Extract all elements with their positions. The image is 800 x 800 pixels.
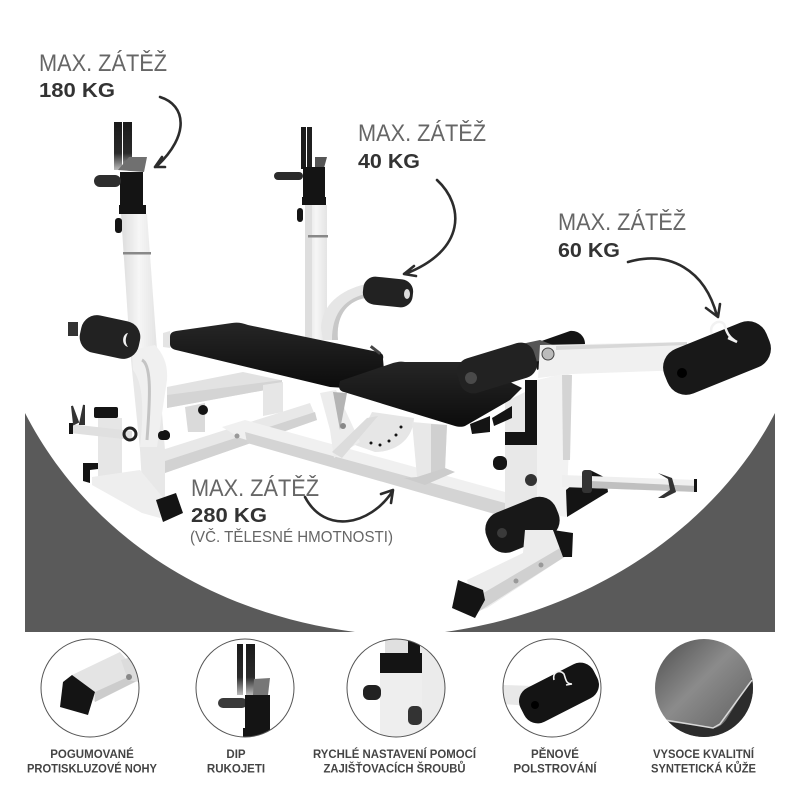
detail: foam padding [503,639,604,737]
arrow: to leg roller [628,259,720,317]
arrow: to rear roller [404,180,455,276]
pivot disc with holes [355,412,414,452]
caption: foam padding: POLSTROVÁNÍ [513,762,597,776]
rear curved arm and roller [321,275,414,340]
label: max load 60 kg [558,209,686,262]
label: max load 180 kg: MAX. ZÁTĚŽ [39,50,167,77]
seat pad [339,362,522,434]
arrow: to dip handle [155,97,181,167]
caption: synthetic leather: VYSOCE KVALITNÍ [653,748,755,761]
label: max load 40 kg: 40 KG [358,151,420,173]
leg extension pad behind [512,331,585,370]
rear bench pad [163,323,384,388]
long arm and vertical column [537,342,687,517]
caption: foam padding [513,748,597,776]
roller on seat [453,339,541,397]
left bar with wing nut [69,405,170,440]
detail: rubber feet [41,639,139,737]
caption: synthetic leather: SYNTETICKÁ KŮŽE [651,762,756,776]
caption: rubber feet [27,748,157,776]
caption: locking screws: RYCHLÉ NASTAVENÍ POMOCÍ [313,748,477,761]
caption: dip handles: DIP [226,749,246,761]
seat post and base plate [404,422,455,485]
caption: foam padding: PĚNOVÉ [531,748,579,761]
caption: dip handles [207,749,265,776]
caption: synthetic leather [651,748,756,776]
front roller [68,312,143,362]
left post and base [83,407,183,522]
label: max load 60 kg: MAX. ZÁTĚŽ [558,209,686,236]
label: max load 40 kg: MAX. ZÁTĚŽ [358,120,486,147]
label: max load 40 kg [358,120,486,173]
caption: rubber feet: POGUMOVANÉ [50,748,134,761]
rear upright with dip handle [274,127,328,340]
caption: locking screws [313,748,477,776]
central strut [320,390,378,458]
label: max load 280 kg [190,475,393,546]
detail: locking screws [347,639,446,739]
upper cross bar and legs [167,372,283,432]
detail: synthetic leather [655,639,753,737]
short bar with collar and wing nut [562,470,697,517]
low roller [480,491,565,558]
label: max load 280 kg: MAX. ZÁTĚŽ [191,475,319,502]
label: max load 60 kg: 60 KG [558,240,620,262]
main rail [222,420,505,517]
caption: rubber feet: PROTISKLUZOVÉ NOHY [27,762,157,776]
column and rear seat tube [493,380,538,510]
detail: dip handles [196,639,294,740]
label: max load 180 kg: 180 KG [39,80,115,102]
caption: locking screws: ZAJIŠŤOVACÍCH ŠROUBŮ [324,762,466,776]
illustration: weight bench [68,122,777,618]
background: gray band with white curved cut-out [25,413,775,632]
right foot [452,530,573,618]
lower cross bar [160,403,317,473]
caption: dip handles: RUKOJETI [207,764,265,776]
front upright with bracket and dip handle [94,122,167,500]
arrow: to main rail [305,490,393,521]
label: max load 280 kg: 280 KG [191,505,267,527]
large roller at the end of arm [657,315,777,401]
label: max load 280 kg: (VČ. TĚLESNÉ HMOTNOSTI) [190,527,393,546]
label: max load 180 kg [39,50,167,102]
